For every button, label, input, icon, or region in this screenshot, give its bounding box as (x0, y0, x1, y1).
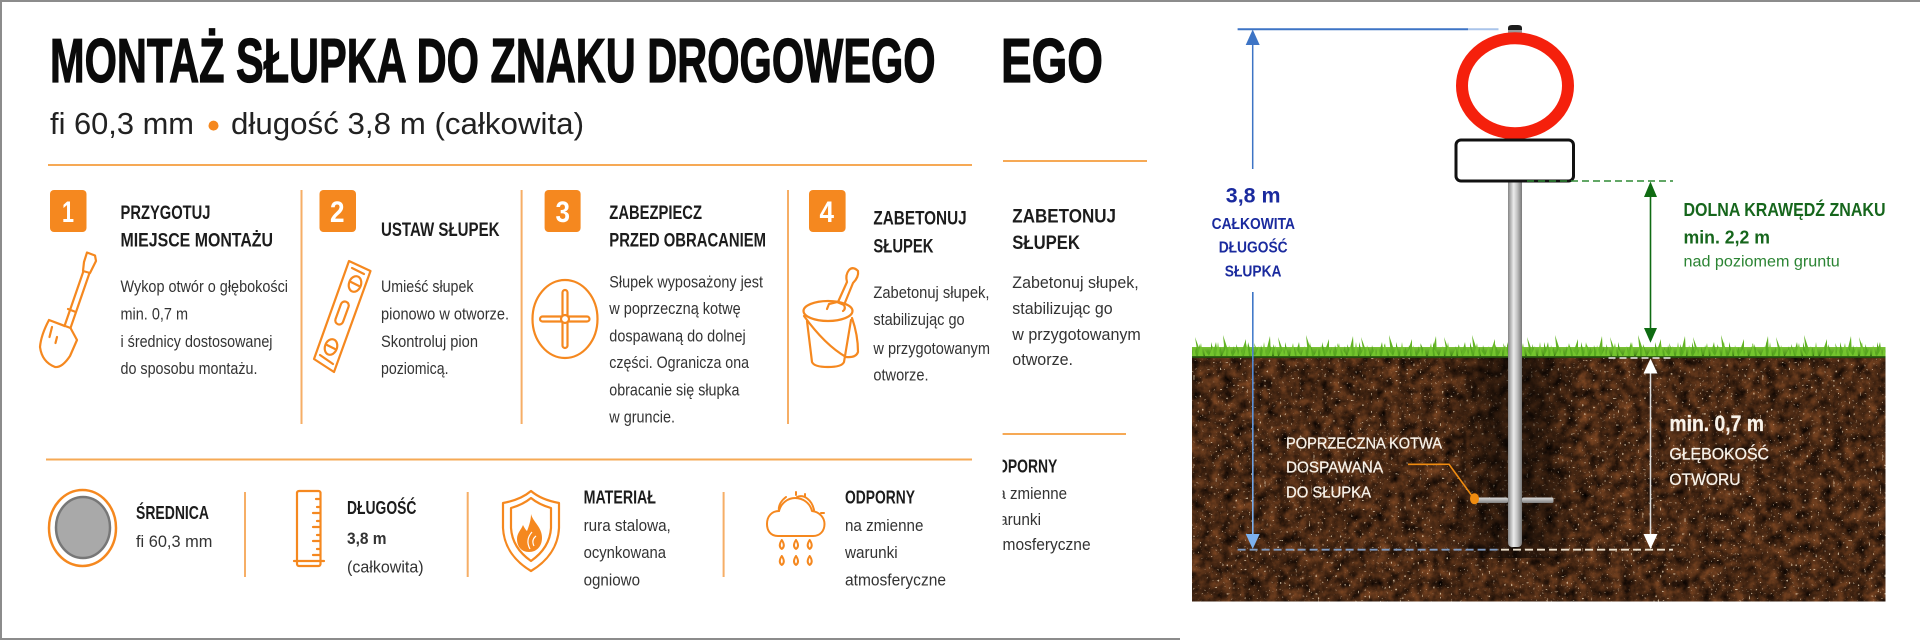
heading step 3: PRZED OBRACANIEM (609, 230, 766, 252)
icon: ruler (294, 491, 324, 566)
text diameter: fi 60,3 mm (136, 533, 212, 551)
step 1 panel (40, 190, 288, 378)
dimension: sign lower edge (1527, 181, 1673, 343)
icon: spirit level (314, 261, 370, 372)
label: hole depth: GŁĘBOKOŚĆ (1669, 444, 1769, 463)
badge 1: 1 (62, 196, 74, 229)
text material: rura stalowa, (584, 517, 671, 535)
supplementary plate (1456, 140, 1574, 181)
title: MONTAŻ SŁUPKA DO ZNAKU DROGOWEGO (50, 27, 936, 96)
text weather resistance: atmosferyczne (845, 572, 946, 590)
soil cross-section (1192, 358, 1886, 602)
round red sign (1462, 38, 1568, 133)
label: sign lower edge (1684, 199, 1886, 271)
title fragment: EGO: EGO (1001, 27, 1103, 96)
label: total length: DŁUGOŚĆ (1219, 238, 1288, 257)
text step 3 (608, 274, 763, 427)
text step 4: otworze. (873, 367, 928, 385)
icon: pipe cross-section (49, 490, 116, 566)
text weather resistance: warunki (844, 544, 898, 562)
spec: weather resistance (767, 487, 946, 590)
text step 4: Zabetonuj słupek, (873, 284, 990, 302)
label: hole depth (1669, 411, 1769, 489)
text weather resistance: ODPORNY (845, 487, 915, 507)
text weather resistance (844, 487, 946, 590)
body duplicate: w przygotowanym (1011, 326, 1141, 344)
text step 2: poziomicą. (381, 360, 448, 378)
spec: length (294, 491, 424, 577)
heading step 4: ZABETONUJ (873, 208, 967, 230)
text material: MATERIAŁ (584, 487, 656, 507)
text step 3: części. Ogranicza ona (609, 354, 750, 372)
icon: anchor cross in hole (532, 280, 598, 358)
step 4 panel (804, 190, 990, 385)
icon: shield with flame (503, 491, 559, 571)
text step 2 (381, 278, 509, 378)
icon: bucket with trowel (804, 268, 858, 367)
label: total length: 3,8 m (1226, 185, 1280, 208)
dimension: hole depth (1644, 358, 1658, 549)
leader line to anchor (1408, 464, 1479, 504)
label: total length: CAŁKOWITA (1212, 216, 1295, 233)
badge 3 (545, 190, 581, 232)
subtitle: długość 3,8 m (całkowita) (231, 106, 584, 141)
text step 3: obracanie się słupka (609, 382, 740, 400)
text step 3: Słupek wyposażony jest (609, 274, 763, 292)
pole (1508, 178, 1522, 547)
heading step 3 (609, 202, 766, 252)
label: sign lower edge: DOLNA KRAWĘDŹ ZNAKU (1684, 199, 1886, 220)
pole and sign (1456, 25, 1574, 547)
dimension: total length (1238, 29, 1498, 549)
text step 4 (873, 284, 990, 385)
label: sign lower edge: min. 2,2 m (1684, 227, 1770, 247)
icon: shovel (40, 252, 96, 367)
text length (347, 497, 424, 577)
spec: material (503, 487, 671, 590)
text step 2: Skontroluj pion (381, 333, 478, 351)
clipped duplicate spec text: atmosferyczne (990, 536, 1091, 554)
heading step 4: SŁUPEK (873, 236, 934, 258)
text material (584, 487, 671, 590)
badge 4: 4 (820, 196, 834, 229)
clipped duplicate spec text (1002, 460, 1090, 554)
icon: cloud with rain and sun (767, 492, 824, 565)
heading duplicate: SŁUPEK (1012, 232, 1080, 254)
subtitle (50, 106, 584, 141)
heading step 1: MIEJSCE MONTAŻU (120, 229, 273, 252)
text weather resistance: na zmienne (845, 517, 923, 535)
text step 1: Wykop otwór o głębokości (120, 278, 288, 296)
text step 2: pionowo w otworze. (381, 306, 509, 324)
body duplicate: stabilizując go (1012, 300, 1113, 318)
text step 4: w przygotowanym (873, 340, 990, 358)
label: hole depth: OTWORU (1669, 470, 1741, 489)
step 2 panel (314, 190, 509, 378)
heading step 4 (873, 208, 967, 258)
text material: ocynkowana (584, 544, 667, 562)
pole cap (1508, 25, 1522, 34)
text step 1: do sposobu montażu. (120, 360, 258, 378)
body duplicate: Zabetonuj słupek, (1012, 274, 1139, 292)
text length: 3,8 m (347, 530, 386, 548)
grass strip (1192, 335, 1886, 358)
heading duplicate (1012, 206, 1116, 254)
clipped duplicate spec text: warunki (987, 511, 1041, 529)
heading step 1 (120, 202, 273, 252)
text step 4: stabilizując go (873, 311, 965, 329)
label: transverse anchor (1286, 435, 1442, 501)
clipped duplicate spec text: na zmienne (989, 485, 1067, 503)
text step 1: i średnicy dostosowanej (120, 333, 272, 351)
text step 1 (120, 278, 288, 378)
clipped duplicate spec text: ODPORNY (987, 457, 1057, 477)
text length: (całkowita) (347, 559, 424, 577)
duplicate step 4 text column (1011, 206, 1141, 369)
heading step 2: USTAW SŁUPEK (381, 219, 500, 241)
badge 2 (320, 190, 356, 232)
body duplicate: otworze. (1012, 351, 1073, 369)
label: transverse anchor: DOSPAWANA (1286, 460, 1383, 477)
label: total length (1212, 185, 1295, 281)
text step 2: Umieść słupek (381, 278, 474, 296)
diagram panel (1192, 25, 1886, 602)
label: total length: SŁUPKA (1225, 264, 1282, 281)
transverse anchor (1476, 498, 1554, 503)
label: hole depth: min. 0,7 m (1669, 411, 1764, 436)
label: sign lower edge: nad poziomem gruntu (1684, 254, 1840, 271)
badge 3: 3 (556, 196, 570, 229)
heading step 1: PRZYGOTUJ (120, 202, 210, 224)
text step 1: min. 0,7 m (120, 306, 188, 324)
text material: ogniowo (584, 572, 640, 590)
text diameter (136, 502, 212, 551)
label: transverse anchor: DO SŁUPKA (1286, 484, 1371, 501)
text diameter: ŚREDNICA (136, 502, 209, 523)
subtitle: fi 60,3 mm (50, 106, 194, 141)
text length: DŁUGOŚĆ (347, 497, 416, 518)
body duplicate (1011, 274, 1141, 369)
text step 3: w gruncie. (608, 409, 675, 427)
heading duplicate: ZABETONUJ (1012, 206, 1116, 228)
label: transverse anchor: POPRZECZNA KOTWA (1286, 435, 1442, 452)
heading step 3: ZABEZPIECZ (609, 202, 702, 224)
badge 2: 2 (330, 196, 344, 229)
text step 3: dospawaną do dolnej (609, 328, 746, 346)
text step 3: w poprzeczną kotwę (608, 300, 741, 318)
step 3 panel (532, 190, 766, 427)
spec: diameter (49, 490, 212, 566)
badge 4 (809, 190, 846, 232)
badge 1 (50, 190, 86, 232)
ground and depth reference lines (1238, 358, 1673, 550)
